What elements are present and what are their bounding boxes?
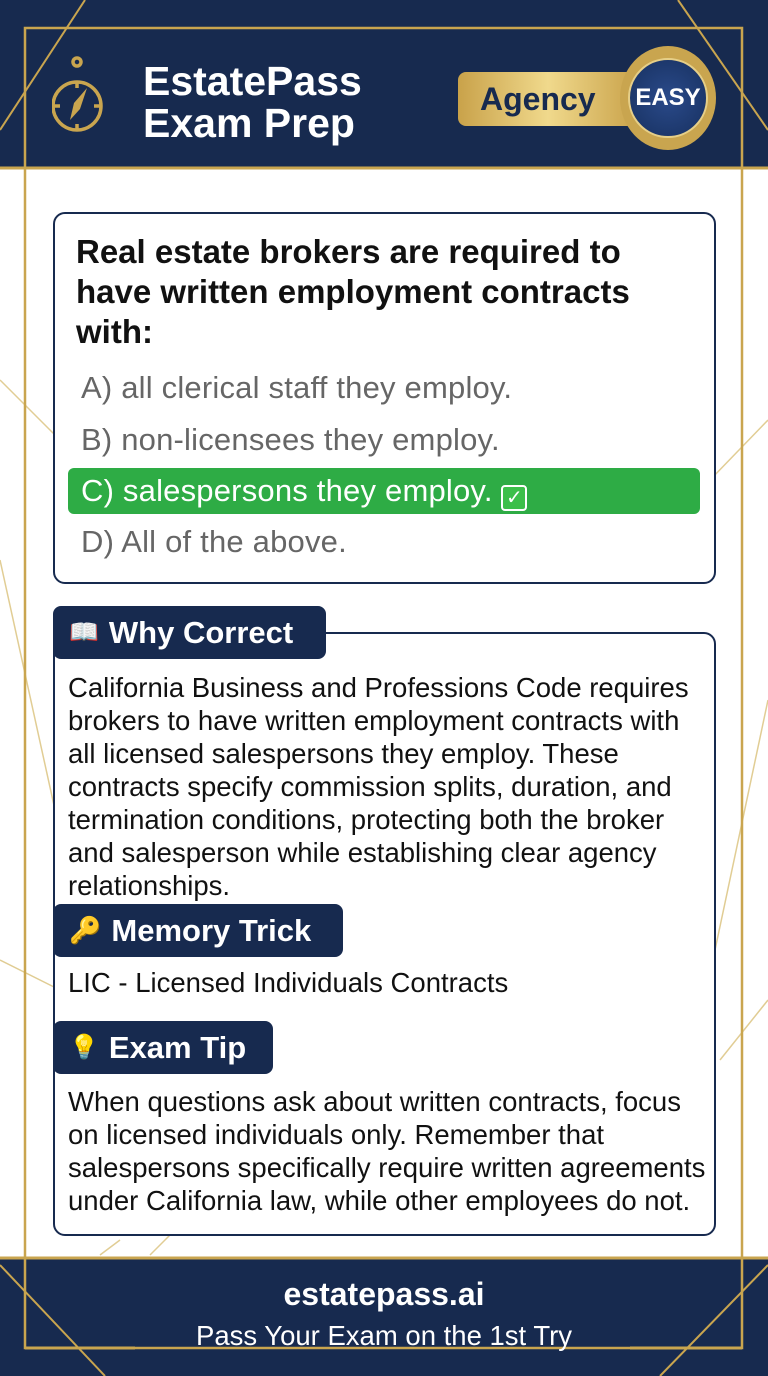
option C correct xyxy=(68,468,700,514)
option D: D) All of the above. xyxy=(81,524,347,559)
title: Exam Prep xyxy=(143,100,355,146)
option C correct: ✓ xyxy=(506,487,523,509)
badge: EASY seal xyxy=(620,46,716,150)
explanation card xyxy=(53,632,716,1236)
question card xyxy=(53,212,716,584)
question text: Real estate brokers are required to have written employment contracts with: xyxy=(76,233,630,350)
tab: Exam Tip: 💡 xyxy=(69,1034,99,1061)
tab: Memory Trick xyxy=(53,904,343,957)
text: exam tip: When questions ask about written contracts, focus on licensed individuals only. Remember that salespersons specifically require written agreements under California law, while other employees do not. xyxy=(68,1086,705,1216)
footer url: estatepass.ai xyxy=(283,1276,484,1312)
tab: Why Correct xyxy=(53,606,326,659)
badge: EASY seal: EASY xyxy=(635,84,701,111)
badge: Agency: Agency xyxy=(480,81,596,117)
tab: Memory Trick: Memory Trick xyxy=(111,912,311,948)
option C correct: C) salespersons they employ. xyxy=(81,473,493,508)
footer xyxy=(0,1258,768,1376)
title xyxy=(143,58,362,146)
footer tagline: Pass Your Exam on the 1st Try xyxy=(196,1320,572,1351)
tab: Exam Tip xyxy=(53,1021,273,1074)
header xyxy=(0,0,768,168)
tab: Why Correct: 📖 xyxy=(69,619,99,646)
tab: Memory Trick: 🔑 xyxy=(69,915,101,945)
tab: Exam Tip: Exam Tip xyxy=(109,1030,246,1064)
badge: Agency xyxy=(458,72,638,126)
tab: Why Correct: Why Correct xyxy=(109,614,293,650)
icon: compass xyxy=(52,56,103,132)
option A: A) all clerical staff they employ. xyxy=(81,370,512,405)
text: why correct: California Business and Professions Code requires brokers to have written employment contracts with all licensed salespersons they employ. These contracts specify commission splits, duration, and termination conditions, protecting both the broker and salesperson while establishing clear agency relationships. xyxy=(68,672,689,901)
text: memory trick: LIC - Licensed Individuals Contracts xyxy=(68,967,508,998)
option B: B) non-licensees they employ. xyxy=(81,422,500,457)
title: EstatePass xyxy=(143,58,362,104)
